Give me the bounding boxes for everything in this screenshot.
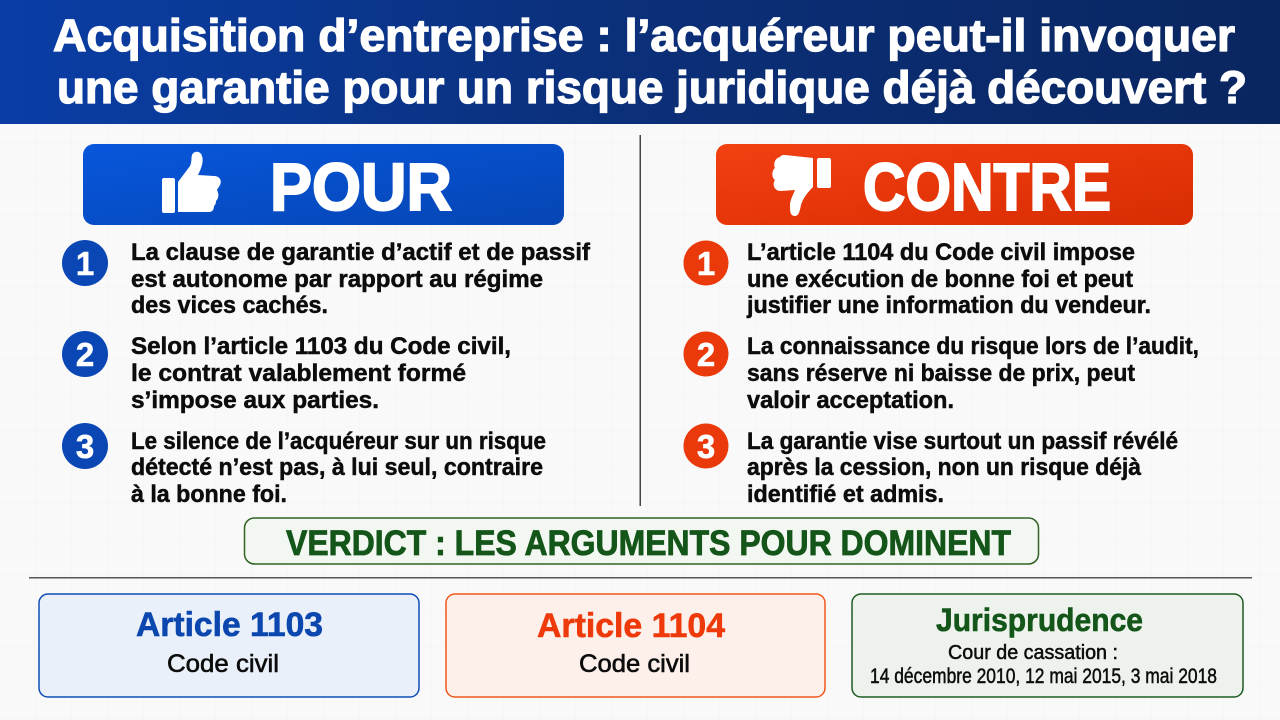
argument 2 pour: le contrat valablement formé [131,360,466,387]
card: Jurisprudence: 14 décembre 2010, 12 mai 2015, 3 mai 2018 [870,665,1217,688]
title line 1: Acquisition d’entreprise : l’acquéreur peut-il invoquer [53,10,1235,61]
argument 3 contre: 3 [697,428,715,465]
argument 3 contre: après la cession, non un risque déjà [747,454,1142,481]
title banner [0,0,1280,124]
argument 2 pour: 2 [76,336,94,373]
argument 1 pour [62,239,591,319]
POUR heading banner [83,144,564,225]
card: Jurisprudence: Jurisprudence [936,602,1143,638]
argument 2 contre: sans réserve ni baisse de prix, peut [747,360,1135,387]
argument 1 contre: 1 [697,245,715,282]
argument 2 pour: Selon l’article 1103 du Code civil, [131,333,511,360]
argument 2 contre: 2 [697,336,715,373]
argument 3 pour: Le silence de l’acquéreur sur un risque [131,428,546,455]
card: Article 1103: Code civil [167,650,279,678]
panel: POUR arguments [62,144,591,508]
argument 2 contre: valoir acceptation. [747,387,954,414]
icon: thumbs up [162,152,221,213]
argument 1 pour: des vices cachés. [131,292,328,319]
argument 2 pour [62,331,511,414]
card: Article 1104: Article 1104 [537,607,725,645]
title line 2: une garantie pour un risque juridique déjà découvert ? [57,62,1247,113]
horizontal divider [29,577,1252,578]
CONTRE label: CONTRE [863,150,1111,225]
POUR label: POUR [270,150,452,225]
card: Article 1104 [446,594,825,697]
argument 3 contre: identifié et admis. [747,481,944,508]
argument 1 contre: L’article 1104 du Code civil impose [747,239,1135,266]
card: Article 1103: Article 1103 [136,606,323,644]
argument 2 contre: La connaissance du risque lors de l’audit, [747,333,1199,360]
argument 1 contre: justifier une information du vendeur. [746,292,1151,319]
argument 1 contre [684,239,1151,319]
argument 1 contre: une exécution de bonne foi et peut [747,266,1133,293]
card: Jurisprudence: Cour de cassation : [948,642,1118,664]
panel: CONTRE arguments [684,144,1199,508]
icon: thumbs down [772,155,831,216]
argument 3 pour [62,423,546,508]
card: Jurisprudence [852,594,1243,697]
verdict box: VERDICT : LES ARGUMENTS POUR DOMINENT [286,524,1011,563]
argument 3 pour: 3 [76,428,94,465]
argument 3 contre: La garantie vise surtout un passif révélé [747,428,1178,455]
center divider between columns [640,135,641,506]
card: Article 1104: Code civil [579,650,690,678]
CONTRE heading banner [716,144,1193,225]
argument 1 pour: 1 [76,245,94,282]
argument 1 pour: La clause de garantie d’actif et de passif [131,239,591,266]
argument 1 pour: est autonome par rapport au régime [131,266,543,293]
argument 2 contre [684,332,1199,414]
card: Article 1103 [39,594,419,697]
argument 3 pour: détecté n’est pas, à lui seul, contraire [131,454,543,481]
argument 2 pour: s’impose aux parties. [131,387,379,414]
argument 3 contre [684,424,1178,508]
argument 3 pour: à la bonne foi. [131,481,287,508]
